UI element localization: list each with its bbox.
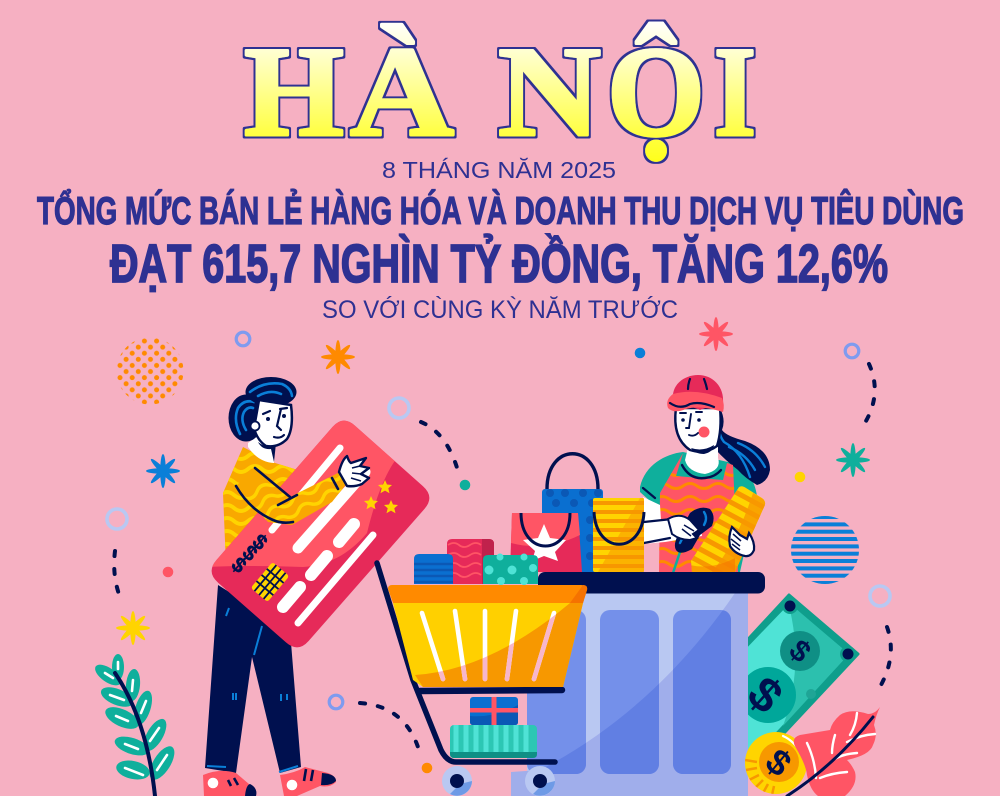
card: dollar marks: $	[248, 530, 272, 555]
man: trousers	[205, 585, 301, 773]
bag: red	[510, 513, 582, 572]
cashier: shirt	[640, 452, 757, 572]
cart: wheels	[442, 766, 555, 796]
title: I	[714, 20, 756, 163]
comparison note: SO VỚI CÙNG KỲ NĂM TRƯỚC	[322, 295, 678, 324]
title: N	[498, 20, 601, 163]
cashier: apron	[655, 453, 739, 572]
cashier: face	[675, 408, 721, 454]
money: $	[782, 634, 817, 669]
coin: $	[758, 740, 800, 785]
cart: lower gifts	[450, 697, 537, 758]
scanned item	[691, 486, 766, 572]
money: $	[737, 667, 793, 724]
cashier: arm	[643, 497, 702, 544]
counter: panels	[527, 610, 731, 774]
cashier: neck and collar	[685, 444, 719, 474]
title: H	[244, 20, 344, 163]
cart: frame	[377, 563, 555, 762]
card: chip	[251, 562, 289, 602]
cashier: cap	[667, 375, 724, 412]
man: sweater	[223, 447, 296, 550]
man with credit card	[203, 377, 429, 796]
cashier: scanning hand	[668, 516, 699, 540]
card: dollar marks	[227, 530, 272, 578]
card: dollar marks: $	[238, 541, 262, 566]
man: shoes	[203, 608, 336, 796]
money	[737, 595, 858, 765]
title	[244, 20, 756, 163]
title: Ộ	[607, 20, 705, 163]
plant	[92, 654, 179, 796]
red leaf	[787, 707, 880, 796]
coin	[745, 732, 807, 795]
cart: basket	[388, 585, 587, 687]
title: À	[350, 20, 454, 163]
cashier: hair	[715, 408, 770, 485]
checkout counter	[511, 593, 748, 796]
credit card	[205, 410, 429, 647]
bag: blue	[542, 454, 603, 572]
subtitle: period: 8 THÁNG NĂM 2025	[382, 157, 616, 183]
cashier: holding hand	[729, 527, 754, 556]
counter top	[538, 572, 765, 594]
decorative confetti	[107, 317, 891, 773]
shopping bags	[510, 454, 644, 572]
cart: goods in basket	[414, 539, 538, 585]
card: dollar marks: $	[227, 553, 251, 578]
bag: yellow	[593, 498, 644, 572]
cashier	[640, 375, 770, 572]
man: arm and hand	[234, 454, 370, 525]
man: neck and head	[228, 377, 296, 463]
cashier: scanner	[673, 508, 714, 573]
shopping cart	[377, 539, 587, 796]
